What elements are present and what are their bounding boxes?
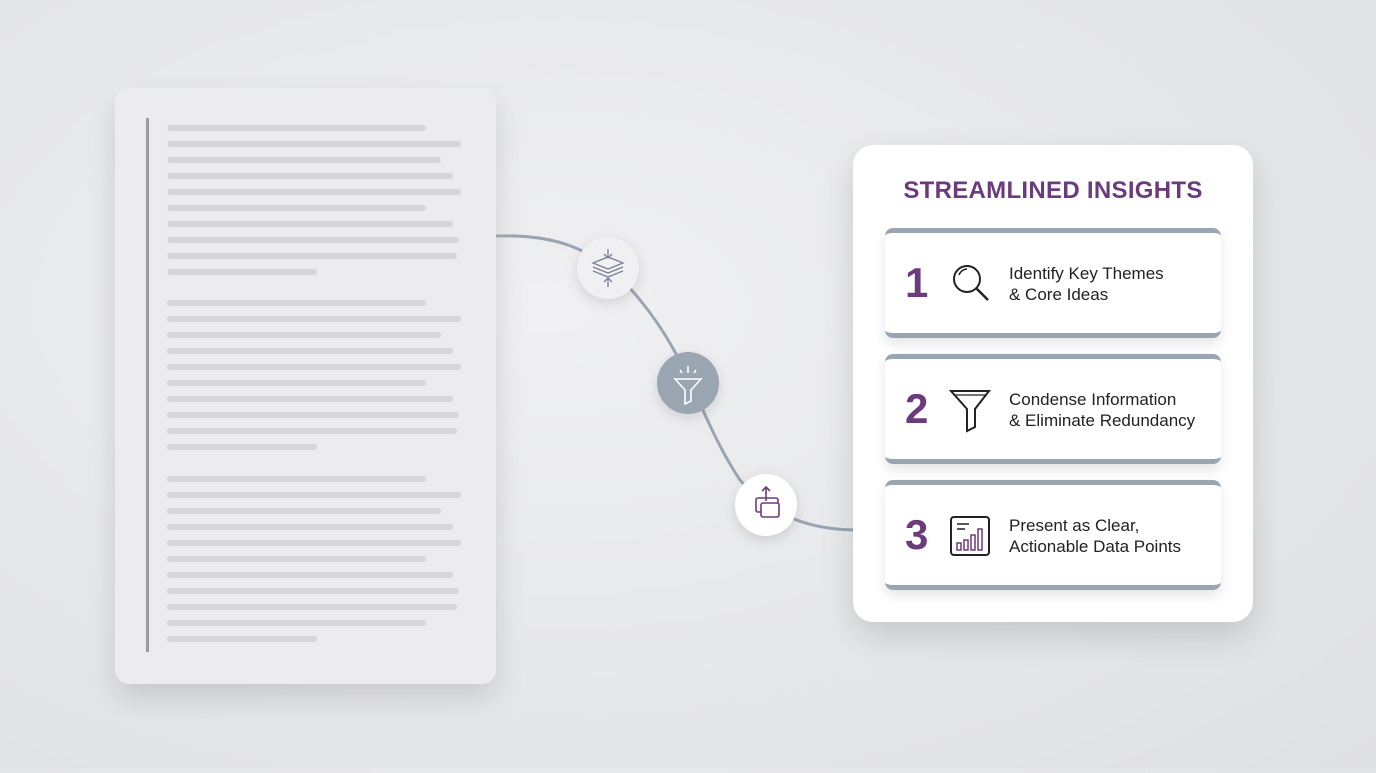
icon: export <box>735 474 797 536</box>
card 2: & Eliminate Redundancy <box>1009 411 1195 430</box>
card 3 <box>885 480 1221 590</box>
icon: funnel <box>948 390 991 433</box>
card 3: Actionable Data Points <box>1009 537 1181 556</box>
card 2: 2 <box>905 385 928 432</box>
icon: compress layers <box>577 237 639 299</box>
icon: magnifier <box>953 265 989 301</box>
heading: STREAMLINED INSIGHTS <box>903 177 1203 204</box>
panel: streamlined insights <box>853 145 1253 622</box>
card 1 <box>885 228 1221 338</box>
card 2: Condense Information <box>1009 390 1176 409</box>
document panel <box>115 88 496 684</box>
card 3: 3 <box>905 511 928 558</box>
card 3: Present as Clear, <box>1009 516 1139 535</box>
icon: funnel <box>657 352 719 414</box>
card 1: & Core Ideas <box>1009 285 1108 304</box>
card 1: 1 <box>905 259 928 306</box>
card 2 <box>885 354 1221 464</box>
icon: chart <box>950 516 990 556</box>
card 1: Identify Key Themes <box>1009 264 1164 283</box>
